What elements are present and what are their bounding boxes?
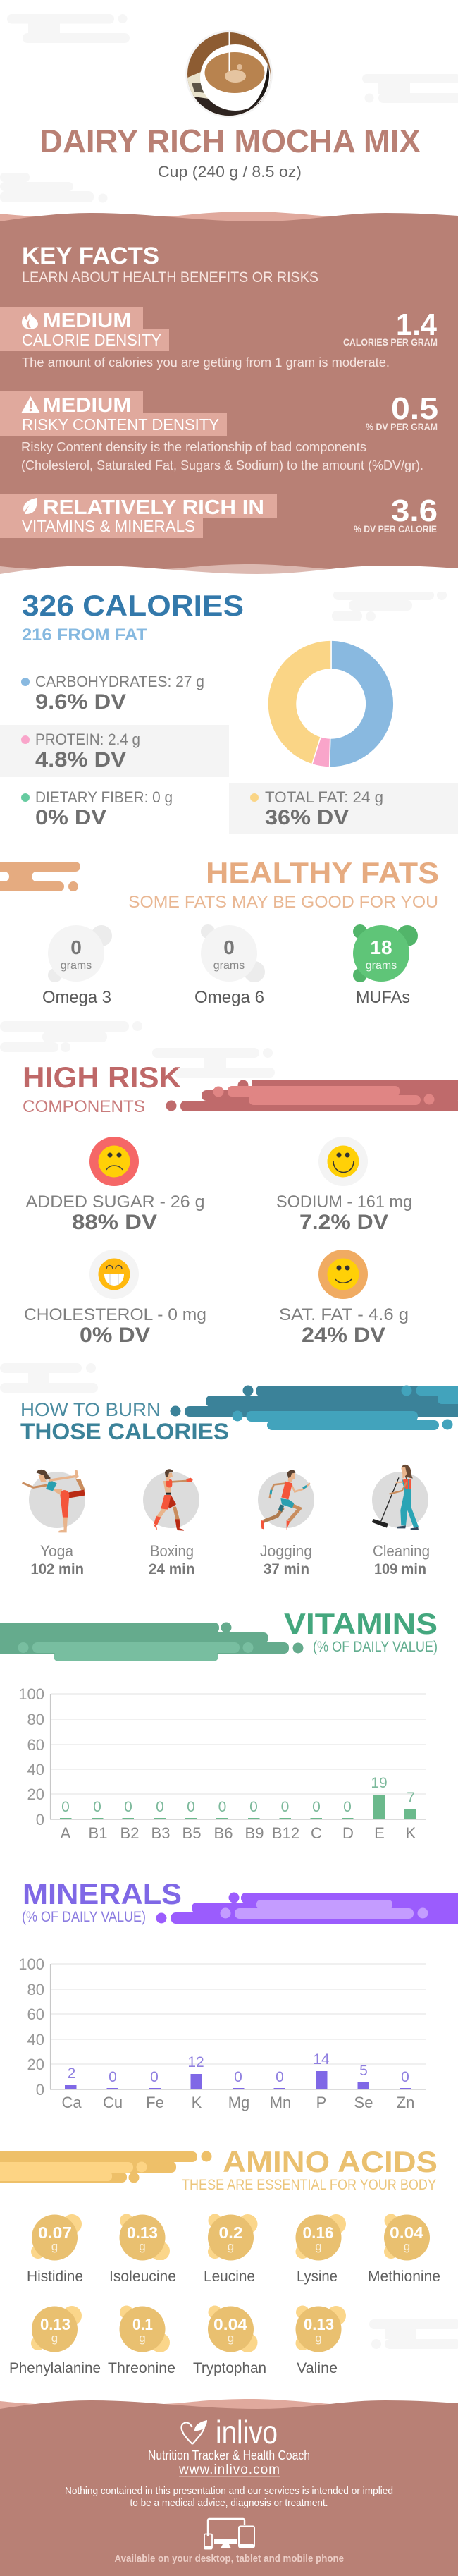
fact: risky content density: Risky Content density is the relationship of bad components [21, 440, 366, 454]
legend: dietary fiber: DIETARY FIBER: 0 g [35, 788, 173, 806]
fact: risky content density: RISKY CONTENT DENSITY [22, 415, 219, 434]
fact: calorie density: CALORIES PER GRAM [343, 336, 438, 348]
icon: devices [204, 2519, 254, 2550]
bar chart: minerals: 12 [187, 2054, 204, 2070]
legend: protein [21, 731, 140, 771]
bar chart: minerals: 80 [27, 1981, 44, 1998]
legend: dietary fiber: 0% DV [35, 806, 106, 829]
bar chart: vitamins: 0 [187, 1799, 195, 1815]
activity: jogging: 37 min [264, 1561, 309, 1577]
amino: valine: 0.13 [304, 2315, 334, 2333]
bar chart: vitamins: 0 [93, 1799, 101, 1815]
bar chart: vitamins: 0 [343, 1799, 352, 1815]
legend: total fat [250, 788, 383, 829]
banner shape: purple [156, 1893, 458, 1924]
bar chart: vitamins: 20 [27, 1786, 44, 1803]
risk item: sodium: 7.2% DV [299, 1211, 388, 1234]
legend: protein: PROTEIN: 2.4 g [35, 731, 140, 748]
heading: those calories: THOSE CALORIES [20, 1419, 229, 1444]
fact: risky content density: % DV PER GRAM [366, 421, 438, 432]
activity: cleaning: 109 min [374, 1561, 426, 1577]
heading: minerals: MINERALS [23, 1877, 182, 1910]
fact: calorie density: The amount of calories you are getting from 1 gram is moderate. [22, 355, 390, 370]
bar chart: vitamins: 7 [407, 1790, 415, 1806]
icon: slight smile face [318, 1250, 368, 1299]
bar chart: vitamins: 0 [218, 1799, 226, 1815]
serving size: Cup (240 g / 8.5 oz) [158, 163, 302, 181]
bar chart: minerals: 60 [27, 2006, 44, 2023]
legend: carbohydrates: CARBOHYDRATES: 27 g [35, 673, 204, 690]
bar chart: vitamins: K [406, 1824, 416, 1842]
activity: cleaning: Cleaning [373, 1542, 430, 1560]
panel: healthy fats [0, 856, 439, 1007]
amino: lysine: 0.16 [303, 2223, 334, 2242]
bar chart: vitamins: B6 [214, 1824, 233, 1842]
food photo: coffee cup [183, 28, 275, 120]
fact: risky content density: (Cholesterol, Saturated Fat, Sugars & Sodium) to the amount (%DV/gr). [21, 458, 423, 472]
icon: sad face [89, 1137, 139, 1186]
banner shape: yellow [0, 2151, 211, 2183]
activity: boxing [143, 1469, 199, 1577]
amino: leucine: g [228, 2240, 234, 2253]
activity: boxing: 24 min [149, 1561, 194, 1577]
bar chart: vitamins: B3 [151, 1824, 170, 1842]
panel: key facts [0, 212, 458, 592]
amino: histidine: 0.07 [38, 2223, 72, 2242]
bar chart: minerals: 0 [109, 2069, 117, 2085]
risk item: cholesterol [24, 1250, 206, 1347]
heading: key facts: KEY FACTS [22, 243, 159, 269]
badge: MUFAs: MUFAs [356, 988, 410, 1007]
heading: healthy fats: HEALTHY FATS [206, 856, 439, 889]
icon: grinning face [89, 1250, 139, 1299]
amino: tryptophan [193, 2306, 266, 2376]
disclaimer: Nothing contained in this presentation and our services is intended or implied [65, 2485, 393, 2497]
bar chart: vitamins: A [61, 1824, 71, 1842]
bar chart: minerals: 5 [359, 2063, 368, 2079]
panel: high risk components [23, 1061, 458, 1347]
fact: calorie density: 1.4 [396, 307, 437, 342]
amino: lysine: g [315, 2240, 322, 2253]
amino: histidine [27, 2214, 83, 2285]
panel: how to burn those calories [20, 1385, 458, 1577]
badge: MUFAs: grams [366, 960, 397, 972]
legend: carbohydrates: 9.6% DV [35, 690, 126, 714]
legend: total fat: TOTAL FAT: 24 g [265, 788, 383, 806]
disclaimer [65, 2485, 393, 2509]
heading: high risk: HIGH RISK [23, 1061, 181, 1094]
bar chart: minerals: 0 [276, 2069, 284, 2085]
amino: threonine [108, 2306, 175, 2376]
fact: risky content density: 0.5 [391, 391, 438, 426]
amino: histidine: g [51, 2240, 58, 2253]
amino: methionine: Methionine [368, 2269, 440, 2285]
bar chart: vitamins: 0 [249, 1799, 258, 1815]
badge: omega 6 [194, 924, 265, 1007]
bar chart: minerals: 0 [234, 2069, 242, 2085]
bar chart: minerals: K [192, 2094, 202, 2111]
tagline: Nutrition Tracker & Health Coach [148, 2448, 310, 2462]
fact: vitamins and minerals: VITAMINS & MINERALS [22, 517, 195, 535]
icon: cleaning figure [372, 1465, 419, 1530]
bar chart: vitamins: D [342, 1824, 354, 1842]
legend: carbohydrates [21, 673, 204, 714]
amino: tryptophan: Tryptophan [193, 2360, 266, 2376]
donut chart [268, 640, 394, 767]
banner shape: red [166, 1080, 458, 1111]
amino: leucine: Leucine [204, 2269, 255, 2285]
banner shape: orange [0, 862, 80, 891]
badge: MUFAs: 18 [370, 936, 392, 958]
bar chart: vitamins: 100 [18, 1685, 44, 1703]
activity: boxing: Boxing [150, 1542, 194, 1560]
subheading: components: COMPONENTS [23, 1097, 145, 1116]
banner shape: green [0, 1622, 303, 1661]
risk item: sodium: SODIUM - 161 mg [276, 1192, 412, 1211]
bar chart: vitamins: 19 [371, 1775, 388, 1791]
bar chart: vitamins: B12 [272, 1824, 299, 1842]
heading: vitamins: VITAMINS [284, 1607, 438, 1640]
badge: omega 3: grams [61, 960, 92, 972]
fact: risky content density: MEDIUM [43, 394, 131, 417]
amino: isoleucine: 0.13 [127, 2223, 158, 2242]
amino: valine [296, 2306, 346, 2376]
legend: protein: 4.8% DV [35, 748, 126, 771]
website link: www.inlivo.com [178, 2462, 280, 2477]
fact: calorie density: MEDIUM [43, 310, 131, 332]
banner shape: teal [171, 1385, 458, 1430]
badge: omega 3 [42, 925, 112, 1007]
risk item: saturated fat: SAT. FAT - 4.6 g [279, 1305, 409, 1324]
activity: jogging [258, 1470, 314, 1577]
risk item: cholesterol: CHOLESTEROL - 0 mg [24, 1305, 206, 1324]
activity: cleaning [372, 1465, 430, 1577]
fact: vitamins and minerals: 3.6 [391, 494, 438, 528]
badge: omega 3: 0 [70, 936, 82, 958]
panel: amino acids [0, 2145, 440, 2376]
badge: omega 3: Omega 3 [42, 988, 111, 1007]
amino: threonine: g [139, 2331, 146, 2345]
logo: inlivo: inlivo [216, 2414, 278, 2450]
activity: jogging: Jogging [260, 1542, 312, 1560]
activity: yoga: Yoga [40, 1542, 74, 1560]
amino: lysine [296, 2214, 346, 2285]
icon: yoga figure [23, 1470, 85, 1532]
risk item: saturated fat [279, 1250, 409, 1347]
panel: calories [0, 589, 458, 834]
bar chart: vitamins: 60 [27, 1736, 44, 1754]
fact: calorie density: CALORIE DENSITY [22, 331, 161, 349]
amino: valine: Valine [297, 2360, 338, 2376]
bar chart: minerals: Fe [146, 2094, 164, 2111]
disclaimer: to be a medical advice, diagnosis or treatment. [130, 2497, 328, 2509]
bar chart: minerals: Mn [270, 2094, 291, 2111]
heading: amino acids: AMINO ACIDS [223, 2145, 438, 2178]
bar chart: minerals: 100 [18, 1955, 44, 1973]
risk item: saturated fat: 24% DV [302, 1324, 385, 1347]
bar chart: vitamins: 0 [36, 1811, 44, 1829]
icon: leaf [23, 498, 37, 514]
bar chart: minerals: 40 [27, 2031, 44, 2049]
bar chart: vitamins: B5 [182, 1824, 201, 1842]
title: DAIRY RICH MOCHA MIX [39, 123, 421, 159]
fact: vitamins and minerals: % DV PER CALORIE [354, 523, 437, 535]
badge: MUFAs [353, 924, 418, 1007]
activity: yoga: 102 min [31, 1561, 84, 1577]
bar chart: minerals [18, 1955, 426, 2111]
bar chart: vitamins: B2 [120, 1824, 139, 1842]
bar chart: vitamins: 0 [156, 1799, 164, 1815]
badge: omega 6: grams [213, 960, 245, 972]
amino: leucine [204, 2214, 258, 2285]
bar chart: minerals: Ca [61, 2094, 82, 2111]
amino: tryptophan: 0.04 [213, 2315, 247, 2333]
fact: risky content density [0, 391, 438, 472]
bar chart: vitamins [18, 1685, 426, 1842]
bar chart: minerals: Se [354, 2094, 373, 2111]
heading: calories: 326 CALORIES [22, 589, 244, 622]
bar chart: vitamins: E [374, 1824, 385, 1842]
amino: threonine: 0.1 [132, 2315, 153, 2333]
amino: phenylalanine [9, 2306, 101, 2376]
bar chart: vitamins: 0 [281, 1799, 289, 1815]
panel: minerals [18, 1877, 458, 2111]
risk item: added sugar: ADDED SUGAR - 26 g [25, 1192, 204, 1211]
amino: threonine: Threonine [108, 2360, 175, 2376]
risk item: added sugar: 88% DV [72, 1211, 157, 1234]
amino: isoleucine: g [139, 2240, 146, 2253]
bar chart: minerals: 0 [401, 2069, 409, 2085]
amino: phenylalanine: 0.13 [40, 2315, 70, 2333]
icon: flame [22, 312, 38, 329]
amino: isoleucine [109, 2214, 176, 2285]
availability note: Available on your desktop, tablet and mobile phone [114, 2553, 344, 2565]
icon: jogging figure [261, 1470, 310, 1530]
icon: big smile face [318, 1137, 368, 1186]
bar chart: vitamins: B9 [245, 1824, 264, 1842]
bar chart: minerals: P [316, 2094, 326, 2111]
bar chart: minerals: Mg [228, 2094, 249, 2111]
panel: vitamins [0, 1607, 438, 1842]
icon: warning triangle [21, 396, 40, 413]
amino: histidine: Histidine [27, 2269, 83, 2285]
badge: omega 6: Omega 6 [194, 988, 264, 1007]
risk item: cholesterol: 0% DV [80, 1324, 150, 1347]
bar chart: vitamins: B1 [89, 1824, 107, 1842]
heading: how to burn: HOW TO BURN [20, 1399, 161, 1420]
amino: valine: g [315, 2331, 322, 2345]
badge: omega 6: 0 [223, 936, 235, 958]
panel: footer [0, 2399, 458, 2576]
subheading: from fat: 216 FROM FAT [22, 625, 147, 645]
bar chart: minerals: 2 [68, 2065, 75, 2082]
amino: methionine: g [404, 2240, 410, 2253]
bar chart: minerals: 14 [313, 2051, 330, 2068]
bar chart: minerals: 0 [150, 2069, 159, 2085]
amino: lysine: Lysine [297, 2269, 338, 2285]
bar chart: minerals: Zn [397, 2094, 414, 2111]
logo: inlivo [181, 2414, 278, 2450]
risk item: added sugar [25, 1137, 204, 1234]
legend: dietary fiber [21, 788, 173, 829]
bar chart: vitamins: 0 [124, 1799, 132, 1815]
subheading: percent of daily value: (% OF DAILY VALUE) [313, 1639, 438, 1655]
bar chart: minerals: 0 [36, 2081, 44, 2099]
amino: methionine: 0.04 [390, 2223, 423, 2242]
subheading: percent of daily value: (% OF DAILY VALUE) [22, 1909, 146, 1925]
bar chart: minerals: 20 [27, 2056, 44, 2073]
amino: phenylalanine: Phenylalanine [9, 2360, 101, 2376]
subheading: healthy fats: SOME FATS MAY BE GOOD FOR YOU [128, 893, 438, 912]
amino: phenylalanine: g [51, 2331, 58, 2345]
activity: yoga [23, 1470, 85, 1577]
fact: vitamins and minerals: RELATIVELY RICH IN [43, 496, 264, 519]
fact: calorie density [0, 307, 438, 370]
icon: boxing figure [153, 1469, 193, 1531]
amino: methionine [368, 2214, 440, 2285]
risk item: sodium [276, 1137, 412, 1234]
amino: tryptophan: g [228, 2331, 234, 2345]
bar chart: vitamins: 0 [312, 1799, 321, 1815]
amino: isoleucine: Isoleucine [109, 2269, 176, 2285]
bar chart: vitamins: 40 [27, 1761, 44, 1778]
amino: leucine: 0.2 [218, 2223, 242, 2242]
bar chart: minerals: Cu [103, 2094, 123, 2111]
legend: total fat: 36% DV [265, 806, 349, 829]
subheading: key facts: LEARN ABOUT HEALTH BENEFITS OR RISKS [22, 269, 318, 286]
bar chart: vitamins: C [311, 1824, 322, 1842]
fact: vitamins and minerals [0, 494, 438, 538]
bar chart: vitamins: 0 [61, 1799, 70, 1815]
bar chart: vitamins: 80 [27, 1711, 44, 1728]
